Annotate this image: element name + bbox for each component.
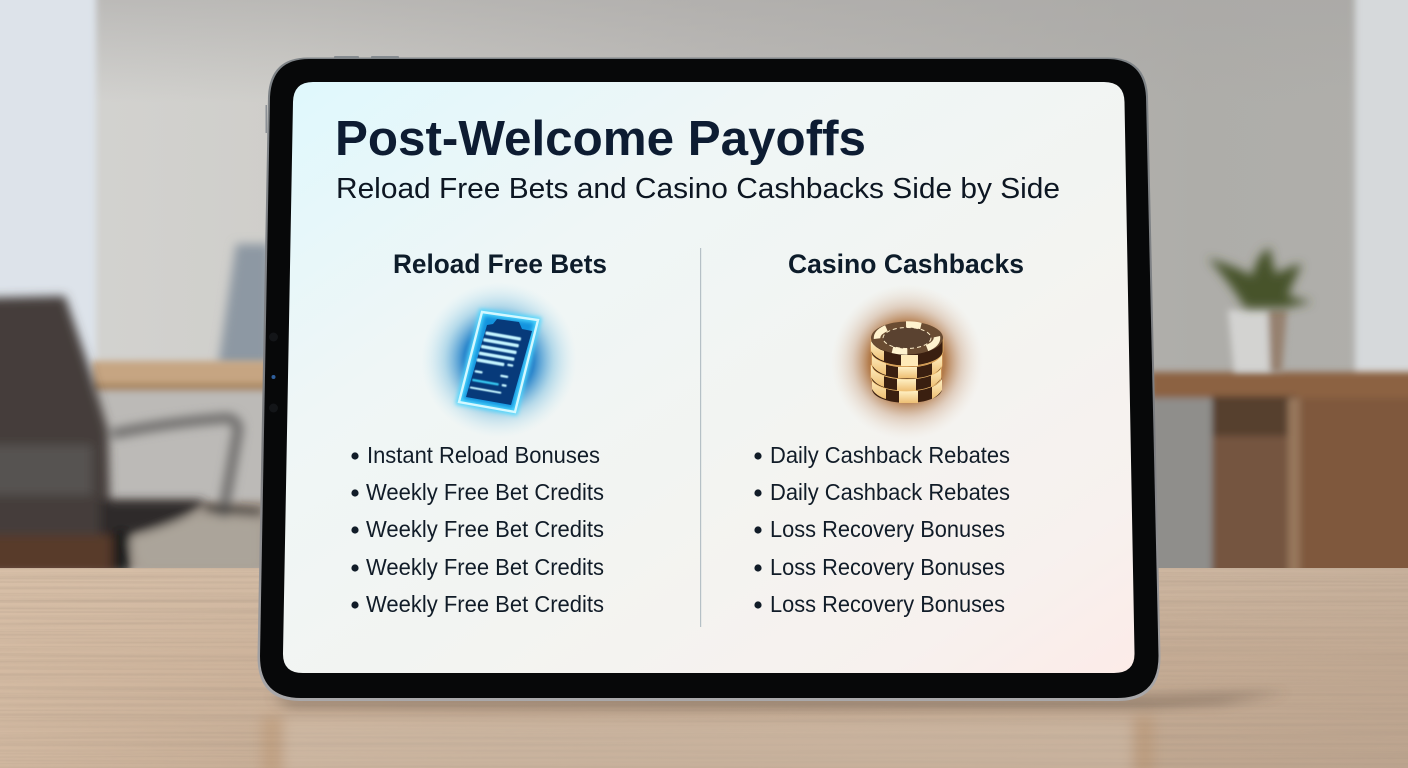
subtitle: Reload Free Bets and Casino Cashbacks Side by Side [336, 173, 1060, 205]
side button [266, 105, 267, 133]
laptop on left desk [218, 244, 270, 366]
panel: casino cashbacks [754, 249, 1024, 617]
office chair [0, 296, 262, 575]
title: Post-Welcome Payoffs [335, 112, 866, 166]
left desk [92, 361, 272, 571]
list: reload free bets: Instant Reload Bonuses [367, 442, 600, 468]
wooden table surface [0, 568, 1408, 768]
tablet reflection on table [262, 716, 1154, 768]
left window [0, 0, 96, 400]
list: casino cashbacks: Loss Recovery Bonuses [770, 516, 1005, 542]
table shadow under tablet [270, 692, 1290, 707]
tablet device [257, 56, 1161, 701]
list: casino cashbacks: Daily Cashback Rebates [770, 479, 1010, 505]
top buttons [334, 56, 399, 58]
list: reload free bets: Weekly Free Bet Credits [366, 554, 604, 580]
heading: reload free bets: Reload Free Bets [393, 249, 607, 279]
potted plant [1208, 248, 1312, 372]
icon: glowing bet slip [421, 282, 577, 438]
tablet body edge [257, 58, 1161, 701]
list: casino cashbacks [754, 442, 1010, 617]
list: reload free bets: Weekly Free Bet Credits [366, 591, 604, 617]
heading: casino cashbacks: Casino Cashbacks [788, 249, 1024, 279]
blurred office background [0, 0, 1408, 583]
icon: casino chip stack [831, 284, 983, 440]
tablet bezel [260, 59, 1158, 698]
list: casino cashbacks: Loss Recovery Bonuses [770, 591, 1005, 617]
right desk [1150, 372, 1408, 583]
list: reload free bets [351, 442, 604, 617]
list: casino cashbacks: Daily Cashback Rebates [770, 442, 1010, 468]
list: reload free bets: Weekly Free Bet Credits [366, 479, 604, 505]
panel: reload free bets [351, 249, 607, 617]
front sensors [269, 332, 278, 412]
screen [283, 82, 1135, 673]
right window [1355, 0, 1408, 380]
list: reload free bets: Weekly Free Bet Credits [366, 516, 604, 542]
column divider [700, 248, 701, 627]
list: casino cashbacks: Loss Recovery Bonuses [770, 554, 1005, 580]
